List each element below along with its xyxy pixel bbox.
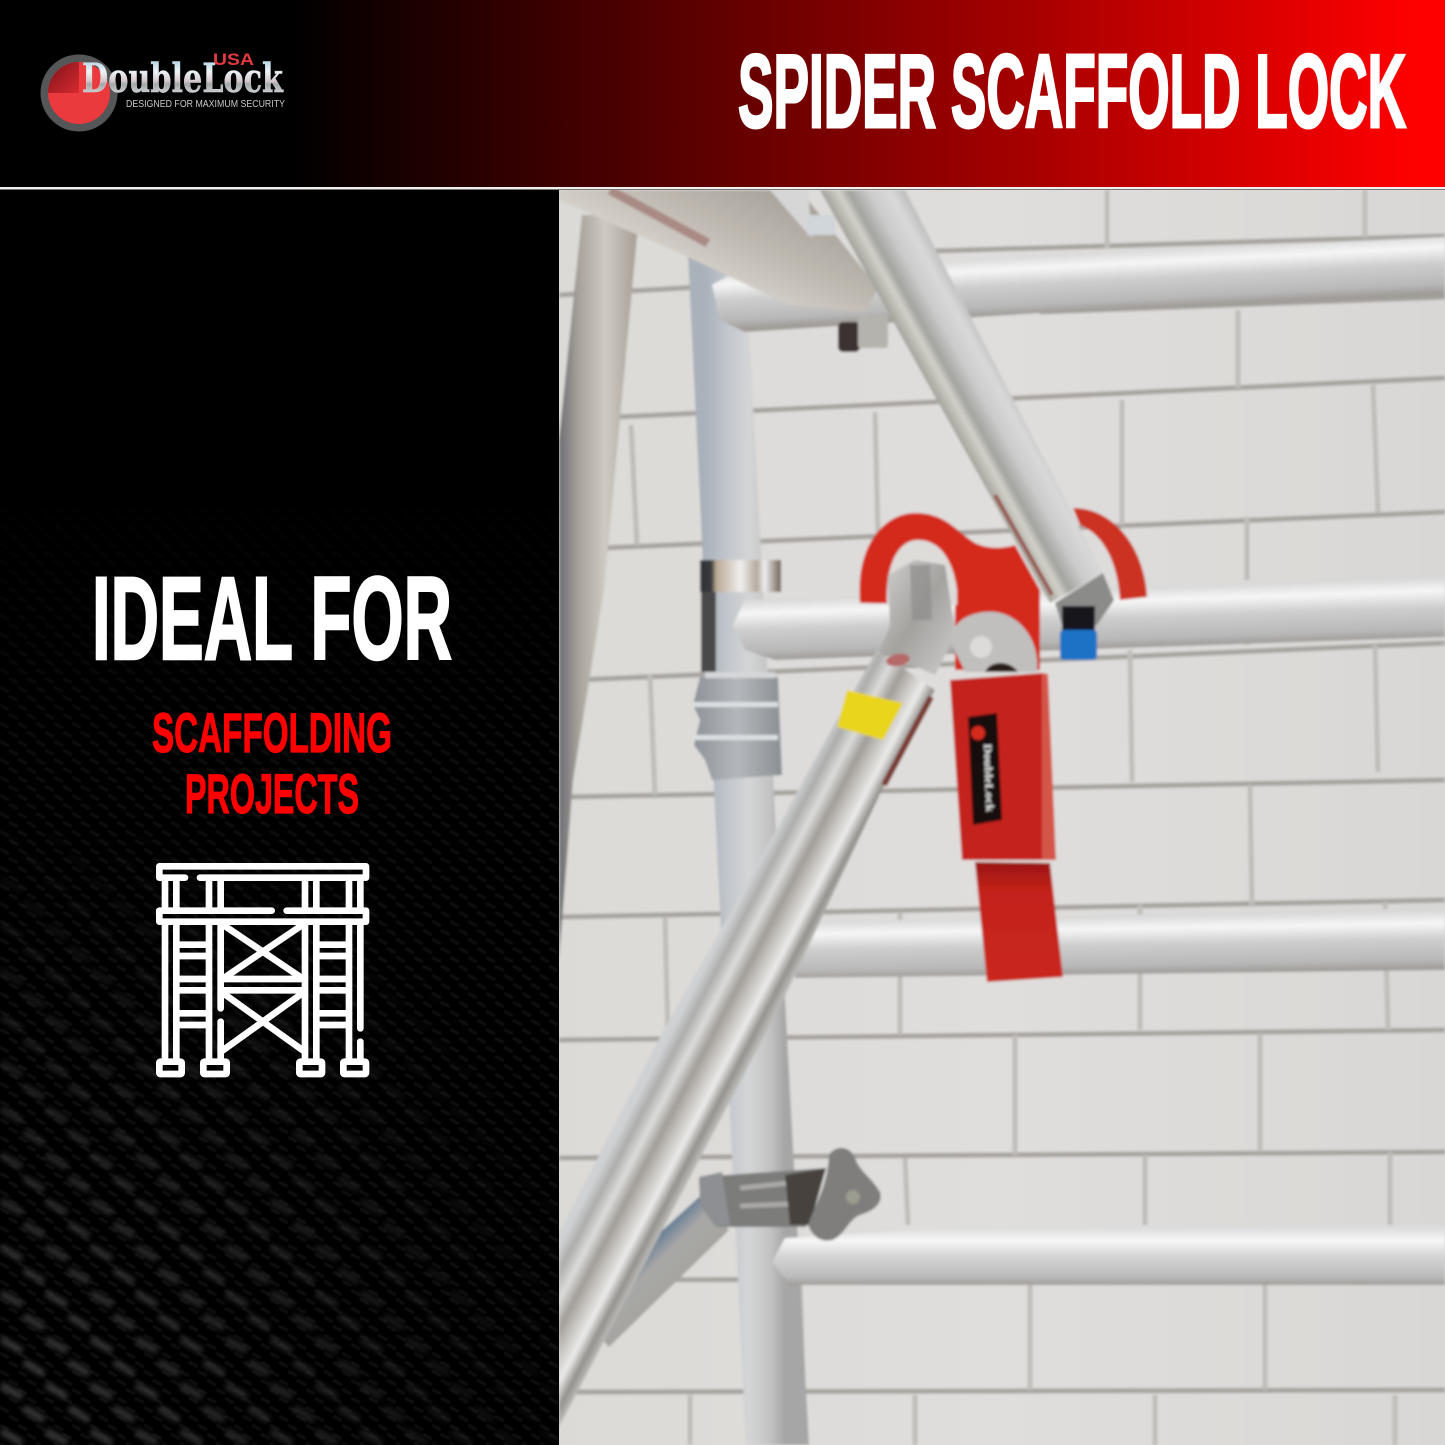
upper diagonal tube xyxy=(820,190,1103,603)
icon: scaffolding xyxy=(159,866,366,1074)
second diagonal brace xyxy=(603,1196,730,1348)
logo tagline: DESIGNED FOR MAXIMUM SECURITY xyxy=(126,98,285,110)
horizontal tubes xyxy=(712,237,1445,1285)
red lock right hook xyxy=(1073,508,1147,600)
chrome clamp on vertical tube xyxy=(700,560,781,592)
logo: DoubleLock USA xyxy=(30,45,296,140)
hasp label with logo xyxy=(968,713,1002,825)
red lock hasp xyxy=(950,673,1056,860)
red lock body and left hook xyxy=(859,513,1040,670)
coupler on vertical tube xyxy=(693,672,782,780)
knob xyxy=(808,1148,881,1241)
subheading: scaffolding projects xyxy=(152,701,392,825)
hasp label with logo: DoubleLock xyxy=(981,744,995,813)
upper bar and small bolt xyxy=(559,190,878,312)
left leaning tube xyxy=(559,215,639,960)
heading: ideal for: IDEAL FOR xyxy=(92,553,452,685)
blue cap fitting xyxy=(1055,573,1114,660)
vertical tube xyxy=(688,255,809,1445)
logo wordmark: DoubleLock xyxy=(82,55,284,102)
tiled wall xyxy=(540,170,1445,1445)
subheading: scaffolding projects: SCAFFOLDING xyxy=(152,701,392,764)
clamp and knob lower xyxy=(699,1148,881,1241)
bolt under upper bar xyxy=(838,316,888,352)
subheading: scaffolding projects: PROJECTS xyxy=(185,762,359,825)
silver fitting on lock xyxy=(880,560,954,675)
photo: scaffold with red lock against tiled wall xyxy=(540,170,1445,1445)
panel: left carbon-fibre panel xyxy=(0,575,558,1445)
header band xyxy=(0,0,1445,190)
silver disc xyxy=(952,612,1037,672)
logo emblem: red disc in grey ring xyxy=(40,54,118,132)
main diagonal tube xyxy=(559,650,935,1427)
yellow tape xyxy=(837,690,903,740)
red lock strap xyxy=(975,862,1063,982)
logo USA mark: USA xyxy=(213,50,254,69)
